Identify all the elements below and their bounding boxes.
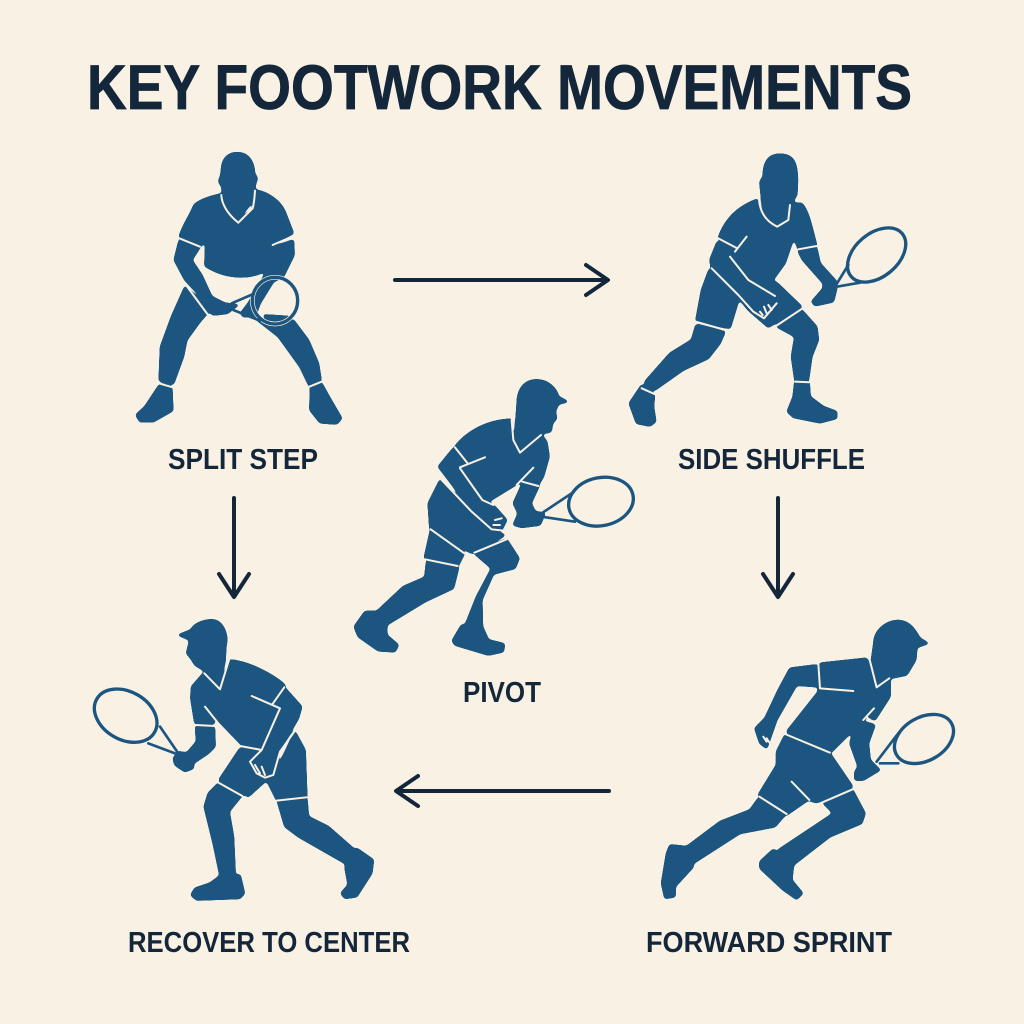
label: side shuffle: SIDE SHUFFLE [678,444,865,476]
figure: forward sprint [662,621,962,899]
arrow: side shuffle to forward sprint [763,498,793,597]
arrow: forward sprint to recover [396,776,609,806]
figure: side shuffle [629,154,916,426]
title: KEY FOOTWORK MOVEMENTS [87,53,912,123]
arrow: split step to recover [219,498,249,597]
arrow: split step to side shuffle [395,265,608,295]
figure: pivot [354,380,638,655]
label: recover to center: RECOVER TO CENTER [128,927,410,959]
label: pivot: PIVOT [463,677,541,709]
label: forward sprint: FORWARD SPRINT [646,927,892,959]
label: split step: SPLIT STEP [168,444,318,476]
figure: split step [136,153,342,424]
figure: recover to center [85,620,373,900]
